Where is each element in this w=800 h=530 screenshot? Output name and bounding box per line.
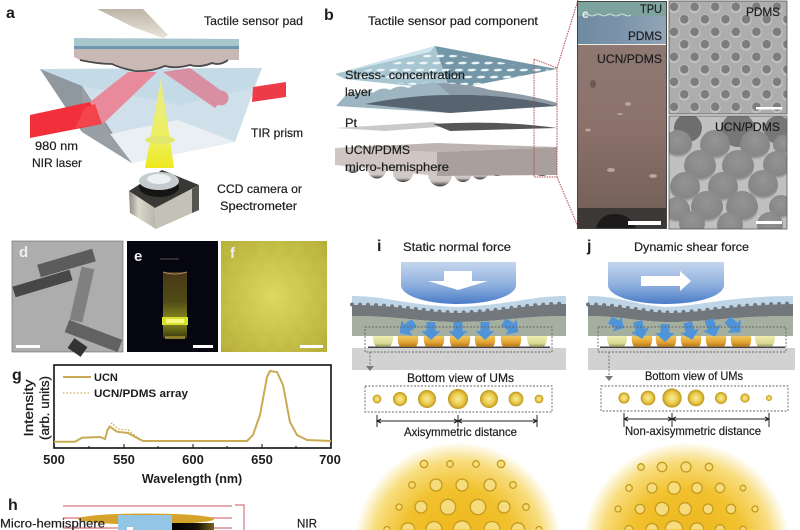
stress concentration layer bbox=[335, 46, 557, 90]
icon: finger bbox=[97, 9, 168, 38]
SEM UCN/PDMS hemispheres bbox=[668, 116, 788, 230]
panel g: emission spectrum chart bbox=[12, 365, 341, 486]
sensor layers bbox=[588, 296, 795, 370]
label: axisymmetric distance: Axisymmetric distance bbox=[404, 425, 517, 439]
UCN PDMS layer bbox=[335, 143, 557, 186]
chart frame bbox=[54, 365, 331, 448]
legend bbox=[63, 372, 189, 400]
panel h: structure diagram bbox=[0, 497, 317, 530]
panel e: vial photo bbox=[127, 241, 218, 352]
indenter with arrow bbox=[401, 262, 516, 304]
panel i: static normal force bbox=[352, 238, 566, 530]
label a: a bbox=[6, 5, 15, 22]
panel b: sensor pad component bbox=[324, 0, 579, 229]
panel e: vial photo: e bbox=[134, 248, 142, 265]
label: non-axisymmetric distance: Non-axisymmetric distance bbox=[625, 424, 761, 438]
bottom view strip bbox=[365, 386, 552, 412]
disc bbox=[78, 514, 214, 530]
force arrows bbox=[394, 314, 524, 341]
callout: zoom box bbox=[534, 0, 579, 229]
glow spot with dots bbox=[582, 442, 790, 530]
label: bottom view: Bottom view of UMs bbox=[407, 371, 514, 385]
x axis tick labels: 550 bbox=[113, 452, 135, 467]
x axis tick labels: 500 bbox=[43, 452, 65, 467]
x axis tick labels: 650 bbox=[251, 452, 273, 467]
label: camera bbox=[217, 182, 302, 213]
icon: tactile sensor pad bbox=[74, 38, 239, 71]
icon: yellow emission beam bbox=[145, 78, 175, 168]
icon: camera bbox=[129, 170, 199, 229]
label h: h bbox=[8, 497, 18, 514]
hemispheres bbox=[373, 336, 547, 347]
panel a: optical setup bbox=[6, 5, 303, 229]
label i: i bbox=[377, 238, 381, 255]
label: camera: CCD camera or bbox=[217, 182, 302, 196]
labels: layers: Pt bbox=[345, 116, 358, 130]
label: laser bbox=[32, 139, 82, 170]
panel j: dynamic shear force bbox=[582, 238, 795, 530]
curve: UCN bbox=[54, 371, 331, 442]
NIR rays bbox=[63, 505, 244, 530]
labels: SEM: c bbox=[582, 7, 589, 21]
panel f: luminescent array: f bbox=[230, 245, 236, 262]
distance measure bbox=[377, 415, 537, 427]
legend: UCN bbox=[94, 372, 118, 384]
bottom view strip bbox=[601, 386, 788, 411]
label g: g bbox=[12, 367, 22, 384]
labels: SEM bbox=[582, 2, 780, 134]
dashed selection and arrow bbox=[365, 327, 552, 366]
panel f: luminescent array bbox=[221, 241, 327, 352]
label: laser: 980 nm bbox=[35, 139, 78, 153]
y axis title bbox=[21, 376, 52, 440]
x axis tick labels: 600 bbox=[182, 452, 204, 467]
x axis tick labels bbox=[43, 452, 341, 467]
panel c: SEM images bbox=[577, 1, 793, 238]
labels: SEM: UCN/PDMS bbox=[715, 120, 780, 134]
icon: red laser beam bbox=[30, 68, 286, 138]
label: laser: NIR laser bbox=[32, 156, 82, 170]
distance measure bbox=[624, 413, 769, 427]
label j: j bbox=[586, 238, 591, 255]
labels: SEM: PDMS bbox=[746, 5, 780, 19]
panel d: TEM nanorods: d bbox=[19, 244, 28, 261]
panel d: TEM nanorods bbox=[12, 241, 123, 352]
dashed selection and arrow bbox=[598, 327, 786, 376]
force arrows bbox=[606, 313, 747, 342]
y axis title: Intensity bbox=[21, 379, 36, 436]
indenter with arrow bbox=[608, 262, 724, 304]
labels: layers bbox=[345, 68, 465, 174]
label: tactile sensor pad: Tactile sensor pad bbox=[204, 14, 303, 28]
heading: dynamic shear force: Dynamic shear force bbox=[634, 240, 749, 254]
label: TIR prism: TIR prism bbox=[251, 126, 303, 140]
SEM PDMS array bbox=[669, 1, 787, 114]
Pt layer bbox=[336, 122, 557, 131]
x axis title: Wavelength (nm) bbox=[142, 472, 242, 486]
x axis tick labels: 700 bbox=[319, 452, 341, 467]
arrow head bbox=[366, 366, 374, 371]
label b: b bbox=[324, 7, 334, 24]
sensor layers bbox=[352, 296, 566, 370]
y axis title: (arb. units) bbox=[38, 376, 52, 440]
labels: layers: micro-hemisphere bbox=[345, 160, 449, 174]
labels: SEM: TPU bbox=[640, 2, 662, 16]
labels: SEM: PDMS bbox=[628, 29, 662, 43]
labels: layers: Stress- concentration bbox=[345, 68, 465, 82]
wavy PDMS layer bbox=[336, 83, 557, 113]
glow spot with dots bbox=[354, 442, 562, 530]
labels: SEM: UCN/PDMS bbox=[597, 52, 662, 66]
label: camera: Spectrometer bbox=[220, 199, 297, 213]
arrow head bbox=[605, 376, 613, 381]
legend: UCN/PDMS array bbox=[94, 388, 189, 400]
heading: static normal force: Static normal force bbox=[403, 240, 511, 254]
labels: layers: layer bbox=[345, 85, 372, 99]
labels: layers: UCN/PDMS bbox=[345, 143, 410, 157]
heading: component: Tactile sensor pad component bbox=[368, 14, 539, 28]
hemispheres bbox=[607, 336, 775, 347]
dotted curve: UCN/PDMS array bbox=[105, 423, 143, 441]
icon: prism bbox=[40, 68, 262, 163]
label: bottom view: Bottom view of UMs bbox=[645, 369, 743, 383]
SEM cross section bbox=[577, 1, 667, 229]
